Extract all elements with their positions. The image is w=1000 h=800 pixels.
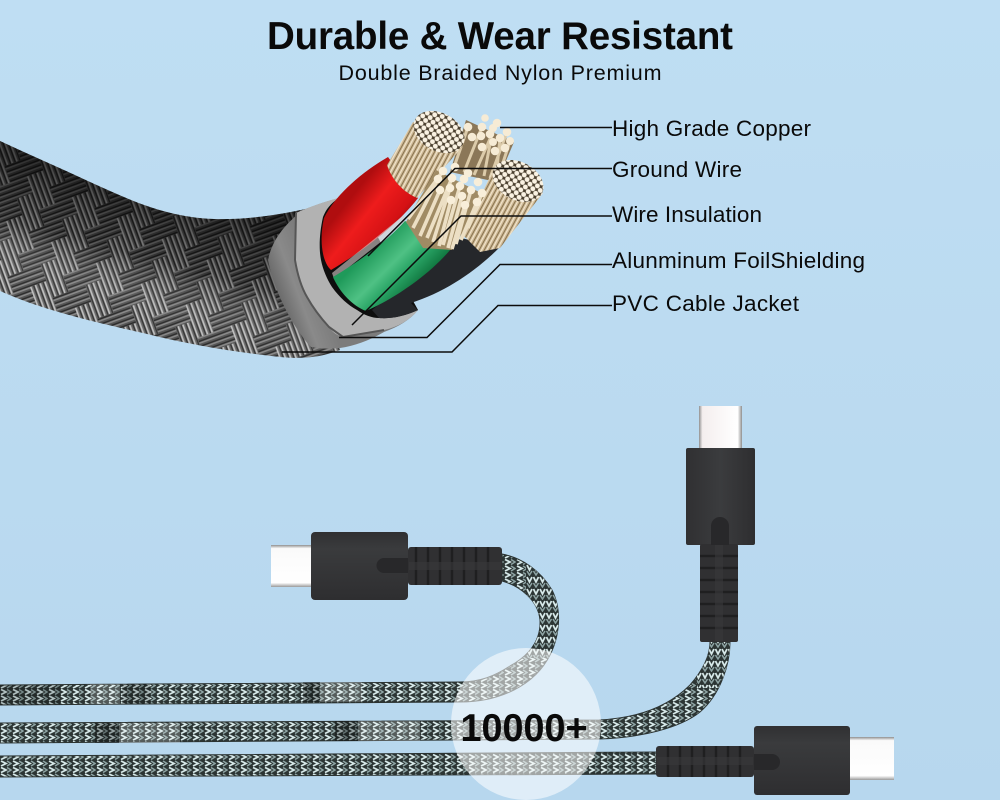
stranded conductor, front bbox=[406, 163, 486, 250]
grey aluminium foil ring bbox=[268, 194, 418, 349]
label: PVC Cable Jacket: PVC Cable Jacket bbox=[612, 291, 800, 316]
strain relief bbox=[656, 746, 754, 777]
label: Wire Insulation: Wire Insulation bbox=[612, 202, 762, 227]
cable: middle bbox=[0, 642, 730, 743]
highlight circle bbox=[451, 648, 601, 800]
nub bbox=[377, 558, 408, 573]
strain relief bbox=[700, 544, 738, 642]
connector: left USB-C bbox=[271, 532, 502, 600]
nub bbox=[754, 754, 780, 770]
housing bbox=[754, 726, 850, 795]
braided nylon jacket bbox=[0, 141, 340, 358]
title: Durable & Wear Resistant bbox=[267, 15, 733, 58]
black wire bbox=[372, 238, 500, 318]
label: Aluminium foil shielding: Alunminum FoilShielding bbox=[612, 248, 865, 273]
copper conductor, right bbox=[463, 152, 551, 252]
strain relief bbox=[408, 547, 502, 585]
metal tip bbox=[699, 406, 742, 449]
pale sliver between wires bbox=[332, 215, 406, 279]
nub bbox=[711, 517, 729, 545]
connector: lower right USB-C bbox=[656, 726, 894, 795]
illustration: cable cross-section bbox=[0, 103, 551, 358]
leader lines bbox=[282, 128, 612, 352]
copper conductor, left bbox=[387, 103, 472, 198]
subtitle: Double Braided Nylon Premium bbox=[338, 61, 662, 85]
label: High Grade Copper: High Grade Copper bbox=[612, 116, 812, 141]
label: Ground Wire: Ground Wire bbox=[612, 157, 742, 182]
metal tip bbox=[271, 545, 312, 587]
cable: bottom bbox=[0, 752, 660, 777]
housing bbox=[311, 532, 408, 600]
metal tip bbox=[849, 737, 894, 780]
stranded conductor, back bbox=[450, 114, 514, 182]
green wire bbox=[333, 221, 455, 311]
red wire bbox=[322, 157, 418, 270]
housing bbox=[686, 448, 755, 545]
cable: top looping bbox=[0, 554, 559, 705]
durability figure: 10000+ bbox=[460, 707, 588, 750]
connector: upper right USB-C bbox=[686, 406, 755, 642]
